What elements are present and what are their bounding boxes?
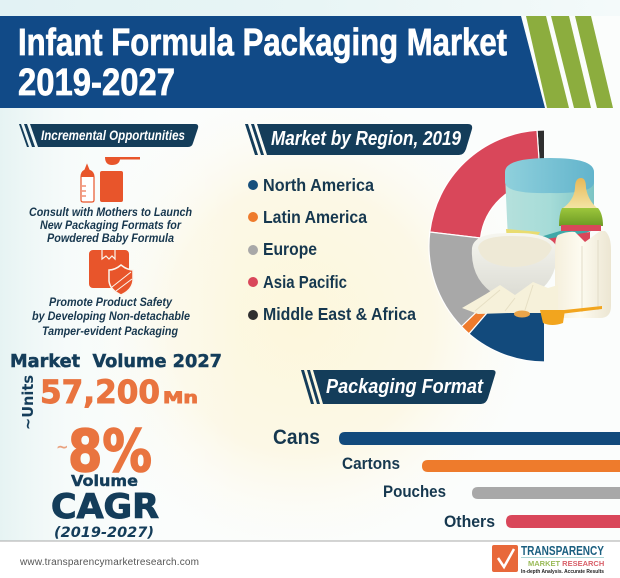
logo bbox=[492, 543, 604, 575]
legend: Europe bbox=[263, 239, 317, 259]
cagr period: (2019-2027) bbox=[54, 525, 154, 541]
bar: cartons: Cartons bbox=[342, 454, 400, 473]
bar: others bbox=[444, 512, 620, 531]
legend: Asia Pacific bbox=[263, 272, 347, 292]
heading: incremental opportunities: Incremental Opportunities bbox=[41, 128, 185, 143]
legend: North America bbox=[263, 175, 374, 195]
text: promote product safety: Tamper-evident Packaging bbox=[42, 324, 179, 338]
cagr value: 8% bbox=[68, 417, 152, 485]
panel: packaging format bbox=[273, 370, 620, 531]
photo: bowl of cereal bbox=[472, 233, 557, 296]
photo: powder pile and scoop bbox=[462, 282, 602, 325]
panel: market volume bbox=[10, 351, 222, 541]
photo: formula can bbox=[505, 158, 594, 250]
title: 2019-2027 bbox=[18, 62, 175, 104]
bar: others: Others bbox=[444, 512, 495, 531]
title banner bbox=[0, 16, 613, 108]
text: promote product safety: Promote Product Safety bbox=[49, 295, 173, 309]
panel: incremental opportunities bbox=[19, 124, 198, 338]
heading: packaging format bbox=[301, 370, 496, 404]
bar: cartons bbox=[342, 454, 620, 473]
logo: MARKET RESEARCH bbox=[528, 559, 604, 568]
units label: ~Units bbox=[19, 375, 37, 430]
text: consult with mothers: New Packaging Formats for bbox=[40, 218, 182, 232]
cagr label: CAGR bbox=[51, 487, 159, 527]
legend: Middle East & Africa bbox=[263, 304, 416, 324]
volume label: Volume bbox=[71, 472, 138, 490]
bar: pouches bbox=[383, 482, 620, 501]
icon: bottle and scoop bbox=[81, 157, 140, 202]
panel: market by region bbox=[245, 124, 611, 362]
cagr value: ~ bbox=[56, 438, 69, 456]
market volume heading: Market Volume 2027 bbox=[10, 351, 222, 372]
title: Infant Formula Packaging Market bbox=[18, 22, 507, 64]
volume value: Mn bbox=[163, 388, 198, 407]
text: consult with mothers: Powdered Baby Formula bbox=[47, 231, 174, 245]
text: consult with mothers: Consult with Mothers to Launch bbox=[29, 205, 192, 219]
bar: cans bbox=[273, 426, 620, 449]
footer url: www.transparencymarketresearch.com bbox=[19, 557, 199, 568]
bar: cans: Cans bbox=[273, 426, 320, 449]
donut chart bbox=[429, 130, 545, 362]
heading: market by region: Market by Region, 2019 bbox=[271, 128, 462, 150]
logo: In-depth Analysis. Accurate Results bbox=[521, 569, 604, 575]
text: promote product safety: by Developing Non-detachable bbox=[32, 309, 190, 323]
legend bbox=[248, 175, 416, 324]
heading: incremental opportunities bbox=[19, 124, 198, 147]
heading: packaging format: Packaging Format bbox=[326, 376, 484, 398]
heading: market by region bbox=[245, 124, 472, 155]
volume value: 57,200 bbox=[40, 373, 160, 411]
legend: Latin America bbox=[263, 207, 367, 227]
photo: baby bottle bbox=[555, 178, 611, 318]
icon: package and shield bbox=[89, 250, 133, 295]
bar: pouches: Pouches bbox=[383, 482, 446, 501]
